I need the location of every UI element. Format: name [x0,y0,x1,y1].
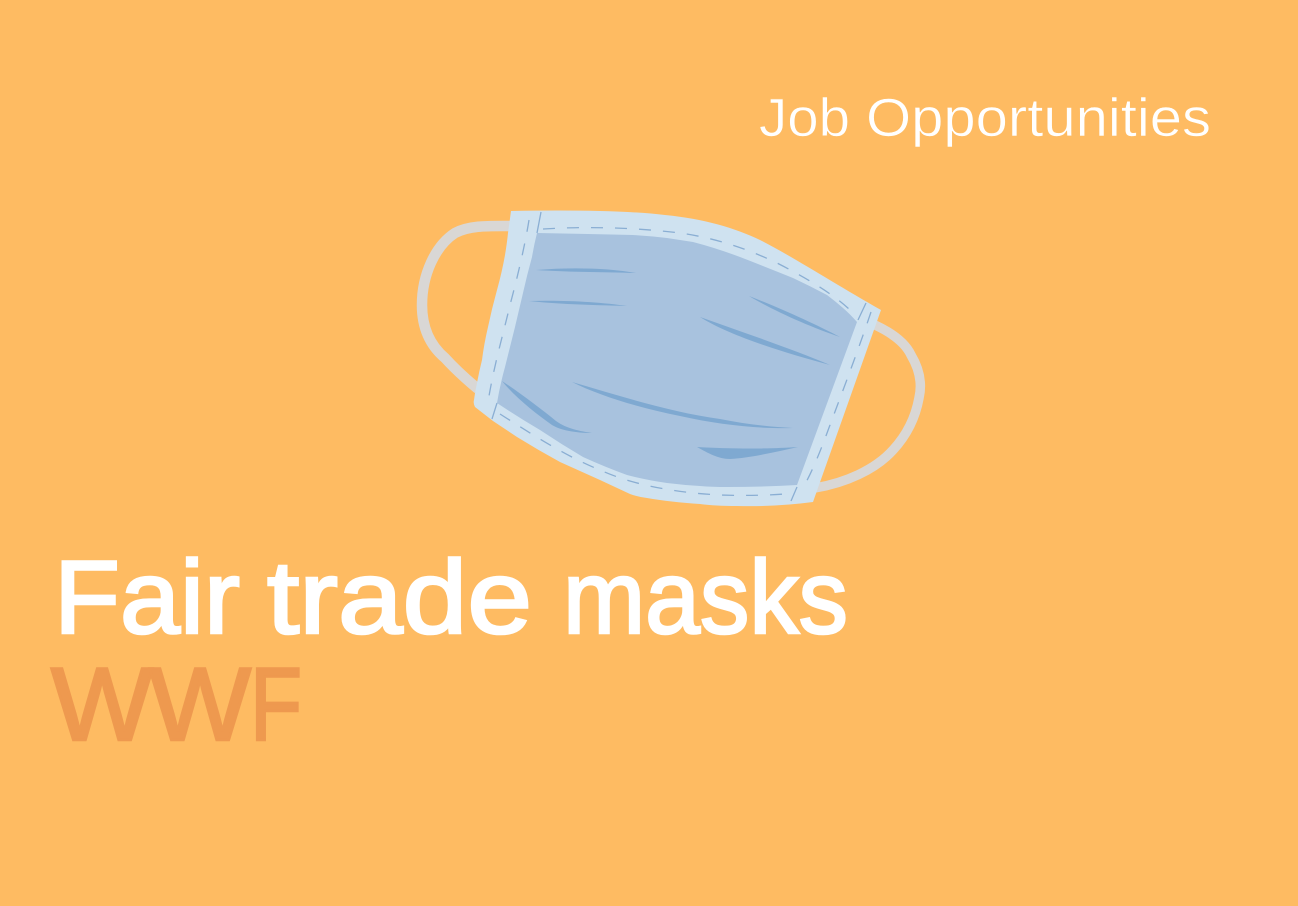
title: Fair trade masks: masks [563,540,848,656]
left ear strap [422,226,512,389]
title: Fair trade masks: trade [267,540,532,656]
title: Fair trade masks: Fair [54,540,240,656]
mask outer band [474,210,881,506]
subtitle: WWF: W [149,647,251,763]
pleat wrinkles [502,268,840,459]
heading: Job Opportunities: Job [759,88,850,148]
stitching [488,212,871,501]
subtitle: WWF [51,647,302,763]
subtitle: WWF: F [250,647,302,763]
icon: face mask [422,210,920,506]
right ear strap [815,325,920,488]
heading: Job Opportunities: Opportunities [866,88,1211,148]
title: Fair trade masks [54,540,848,656]
subtitle: WWF: W [51,647,153,763]
mask inner pleated panel [497,233,857,487]
